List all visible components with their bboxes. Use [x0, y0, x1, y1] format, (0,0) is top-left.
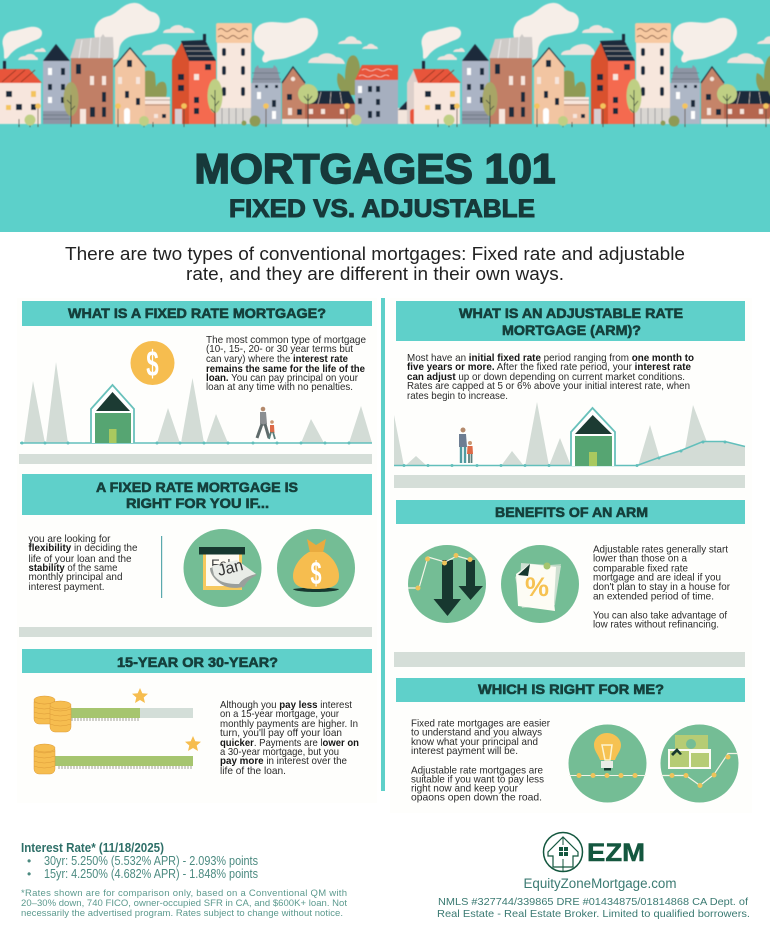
spacer strip	[19, 454, 372, 464]
text block	[407, 352, 694, 402]
icon: standing parent and child	[459, 428, 473, 463]
text block: low rates without refinancing.	[593, 619, 719, 631]
timeline with mountains and house	[20, 362, 372, 444]
icon: walking parent and child	[257, 407, 275, 439]
text block: stability of the same	[28, 562, 118, 574]
text block: comparable fixed rate	[593, 562, 688, 574]
illustration: town skyline with clouds	[0, 3, 770, 127]
banner background	[0, 0, 770, 232]
text block: remains the same for the life of the	[206, 363, 365, 375]
panel backdrop right	[390, 298, 752, 813]
spacer strip	[394, 652, 745, 667]
text block: an extended period of time.	[593, 591, 714, 603]
icon: coin stack 30-year	[34, 744, 55, 774]
text block: Most have an initial fixed rate period ranging from one month to	[407, 352, 694, 364]
text block: lower than those on a	[593, 553, 687, 565]
text block: life of your loan and the	[28, 553, 132, 565]
text block: right now and keep your	[411, 783, 518, 795]
text block: monthly principal and	[28, 571, 123, 583]
disclaimer: necessarily the advertised program. Rates subject to change without notice.	[21, 908, 343, 919]
rates block: 15yr: 4.250% (4.682% APR) - 1.848% points	[44, 867, 258, 881]
logo: EZM: EZM	[587, 839, 645, 867]
icon: wallet and changing rate	[660, 724, 738, 802]
subtitle: FIXED VS. ADJUSTABLE	[229, 195, 535, 223]
spacer strip	[19, 627, 372, 637]
text block: you are looking for	[28, 533, 111, 545]
text block	[220, 699, 359, 777]
text block: pay more in interest over the	[220, 755, 347, 767]
text block: monthly payments are higher. In	[220, 718, 358, 730]
icon: money bag: $	[310, 555, 322, 591]
title: MORTGAGES 101	[194, 145, 556, 192]
text block: (10-, 15-, 20- or 30 year terms but	[206, 343, 353, 355]
icon: star	[132, 688, 148, 703]
text block: mortgage and are ideal if you	[593, 572, 721, 584]
icon: calendar: Feb	[211, 556, 235, 572]
heading	[396, 301, 745, 341]
panel: 15-year or 30-year	[22, 649, 372, 777]
chart: 15-year bar	[71, 688, 193, 721]
icon: dollar coin	[130, 341, 174, 385]
icon: calendar: Jan	[216, 557, 245, 580]
rates block	[21, 841, 258, 881]
disclaimer	[21, 888, 347, 919]
heading: WHAT IS AN ADJUSTABLE RATE	[459, 305, 683, 321]
chart: 30-year bar	[55, 736, 201, 769]
panel: what is a fixed rate mortgage	[20, 301, 372, 444]
disclaimer: *Rates shown are for comparison only, based on a Conventional QM with	[21, 888, 347, 899]
heading	[22, 474, 372, 515]
rates block: •	[27, 867, 31, 881]
icon: light bulb	[568, 724, 646, 802]
heading: RIGHT FOR YOU IF...	[126, 495, 269, 511]
icon: money bag	[277, 529, 355, 607]
heading	[396, 678, 745, 702]
heading: A FIXED RATE MORTGAGE IS	[96, 479, 298, 495]
centre divider	[381, 298, 385, 791]
text block: know what your principal and	[411, 736, 538, 748]
heading: 15-YEAR OR 30-YEAR?	[117, 654, 278, 670]
intro text: rate, and they are different in their own ways.	[186, 263, 564, 284]
text block: suitable if you want to pay less	[411, 774, 544, 786]
heading: BENEFITS OF AN ARM	[495, 504, 648, 520]
icon: percent documents: %	[525, 572, 549, 602]
text block	[411, 718, 550, 804]
licensing text	[437, 896, 750, 920]
panel: fixed rate is right for you if	[22, 474, 372, 607]
rates block: 30yr: 5.250% (5.532% APR) - 2.093% points	[44, 854, 258, 868]
text block: on a 15-year mortgage, your	[220, 708, 339, 720]
text block: rates begin to increase.	[407, 390, 508, 402]
text block: loan at any time with no penalties.	[206, 381, 353, 393]
heading	[396, 500, 745, 524]
text block	[206, 334, 366, 393]
text block: Although you pay less interest	[220, 699, 352, 711]
text block: turn, you'll pay off your loan	[220, 727, 342, 739]
text block: Fixed rate mortgages are easier	[411, 718, 550, 730]
text block: interest payment.	[28, 581, 104, 593]
text block: to understand and you always	[411, 727, 542, 739]
heading	[22, 649, 372, 673]
heading: MORTGAGE (ARM)?	[502, 322, 641, 338]
timeline with mountains, house and rising rate line	[394, 402, 745, 467]
spacer strip	[394, 475, 745, 488]
text block: flexibility in deciding the	[28, 542, 138, 554]
text block: Adjustable rate mortgages are	[411, 764, 543, 776]
divider line	[161, 536, 162, 598]
text block: five years or more. After the fixed rate period, your interest rate	[407, 361, 691, 373]
icon: star	[185, 736, 201, 751]
rates block: •	[27, 854, 31, 868]
text block: loan. You can pay principal on your	[206, 372, 358, 384]
panel backdrop left	[17, 298, 377, 803]
text block: Adjustable rates generally start	[593, 544, 728, 556]
text block: The most common type of mortgage	[206, 334, 366, 346]
icon: dollar coin: $	[146, 345, 159, 384]
website: EquityZoneMortgage.com	[524, 876, 676, 891]
text block	[28, 533, 138, 593]
text block: can vary) where the interest rate	[206, 353, 348, 365]
text block	[593, 544, 730, 631]
panel: which is right for me	[396, 678, 745, 804]
panel: benefits of an ARM	[396, 500, 745, 631]
intro text: There are two types of conventional mortgages: Fixed rate and adjustable	[65, 243, 685, 264]
icon: calendar	[184, 529, 262, 607]
heading	[22, 301, 372, 326]
heading: WHICH IS RIGHT FOR ME?	[478, 681, 664, 697]
text block: Rates are capped at 5 or 6% above your initial interest rate, when	[407, 380, 690, 392]
text block: don't plan to stay in a house for	[593, 581, 730, 593]
disclaimer: 20–30% down, 740 FICO, owner-occupied SFR in CA, and $600K+ loan. Not	[21, 898, 347, 909]
panel: what is an adjustable rate mortgage	[394, 301, 745, 467]
text block: a 30-year mortgage, but you	[220, 746, 339, 758]
text block: interest payment will be.	[411, 745, 518, 757]
rates block: Interest Rate* (11/18/2025)	[21, 841, 164, 855]
text block: You can also take advantage of	[593, 609, 727, 621]
text block: life of the loan.	[220, 765, 286, 777]
logo: EZM	[544, 832, 645, 872]
icon: percent documents	[501, 545, 579, 623]
text block: quicker. Payments are lower on	[220, 737, 359, 749]
licensing text: Real Estate - Real Estate Broker. Limited to qualified borrowers.	[437, 908, 750, 920]
text block: opaons open down the road.	[411, 792, 542, 804]
text block: can adjust up or down depending on current market conditions.	[407, 371, 685, 383]
icon: falling rate arrows	[408, 545, 486, 623]
heading: WHAT IS A FIXED RATE MORTGAGE?	[68, 305, 326, 321]
licensing text: NMLS #327744/339865 DRE #01434875/01814868 CA Dept. of	[438, 896, 748, 908]
intro text	[65, 243, 685, 284]
icon: coin stacks 15-year	[34, 696, 71, 732]
